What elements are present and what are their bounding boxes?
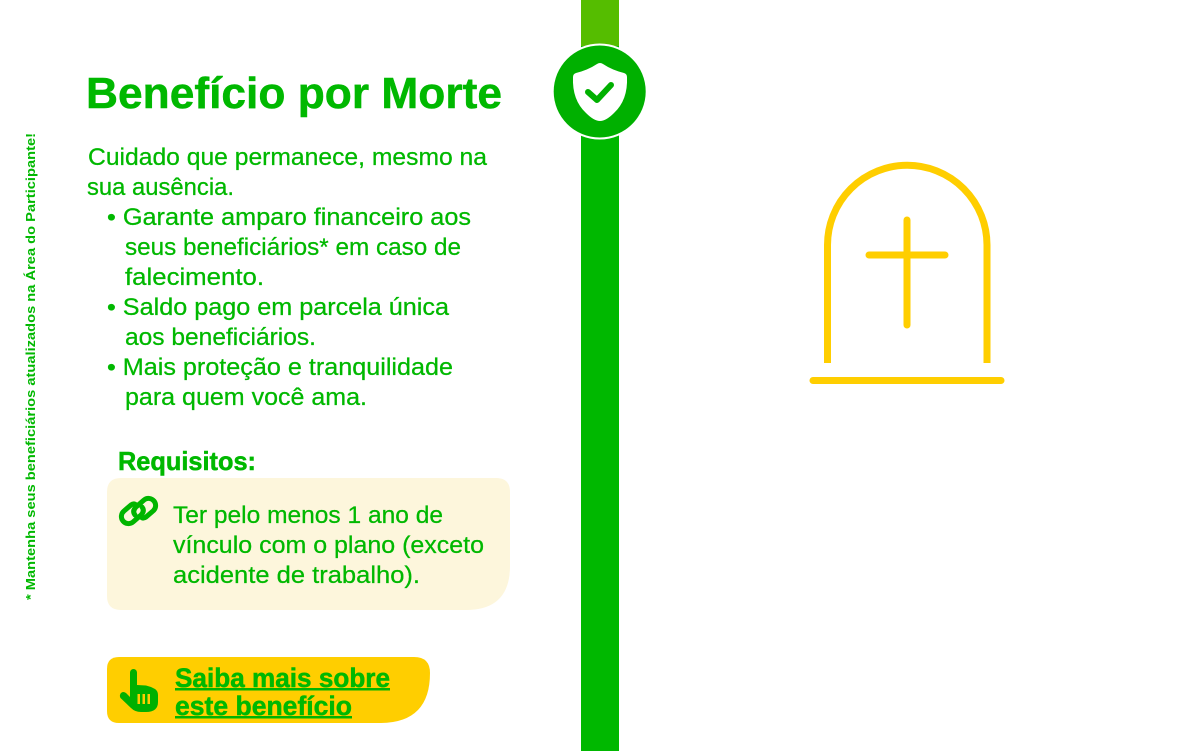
icon: pointing hand [120,669,158,712]
description text block: para quem você ama. [125,384,367,411]
side note: * Mantenha seus beneficiários atualizados na Área do Participante! [23,133,38,600]
description text block [87,144,488,411]
heading: requisitos: Requisitos: [118,446,256,476]
link text [175,663,390,721]
icon: shield badge [552,44,648,140]
link text: Saiba mais sobre [175,663,390,693]
description text block: seus beneficiários* em caso de [125,234,461,261]
button: saiba mais [107,657,430,723]
description text block: • Saldo pago em parcela única [107,294,450,321]
description text block: • Garante amparo financeiro aos [107,204,471,231]
link text: este benefício [175,691,352,721]
panel: requisitos: acidente de trabalho). [173,562,420,589]
vertical timeline bar [581,0,619,751]
panel: requisitos: Ter pelo menos 1 ano de [173,502,443,529]
description text block: falecimento. [125,264,264,291]
description text block: • Mais proteção e tranquilidade [107,354,453,381]
description text block: Cuidado que permanece, mesmo na [88,144,488,171]
description text block: sua ausência. [87,174,234,201]
description text block: aos beneficiários. [125,324,316,351]
panel: requisitos: vínculo com o plano (exceto [173,532,484,559]
icon: chain link [121,498,156,524]
title: Benefício por Morte [86,69,502,118]
icon: tombstone with cross [813,165,1001,380]
panel: requisitos [107,478,510,610]
